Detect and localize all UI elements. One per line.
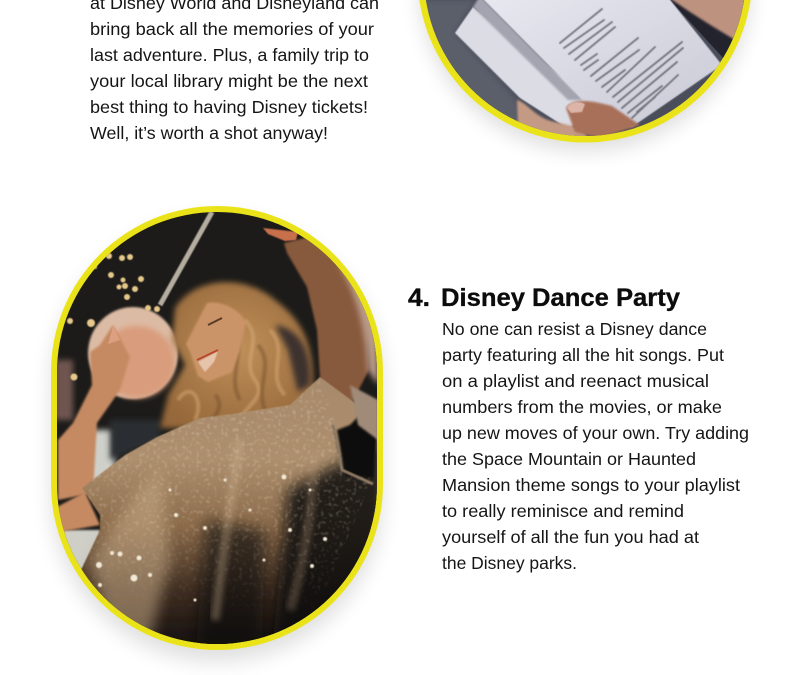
text block: item 4 description: the Space Mountain or Haunted [442,449,696,469]
text block: item 4 description: yourself of all the fun you had at [442,527,699,547]
text block: item 4 description: Mansion theme songs to your playlist [442,475,740,495]
sub: background room [92,426,119,480]
sub: face [186,302,246,382]
text block: item 3 closing paragraph [90,0,379,143]
text block: item 4 description: the Disney parks. [442,553,577,573]
text block: item 4 description: to really reminisce and remind [442,501,684,521]
text block: item 3 closing paragraph: last adventure. Plus, a family trip to [90,45,369,65]
sub: lamp shade [88,307,178,399]
text block: item 3 closing paragraph: Well, it’s worth a shot anyway! [90,123,328,143]
sub: left arm and hand [58,325,130,500]
sub: dark area behind right hand [670,0,744,58]
sub: raised right arm [283,237,370,402]
sub: gutter shadow [473,0,583,100]
sub: lamp cord [160,212,212,305]
sub: back sheet [455,7,590,130]
text block: item 4 description [442,319,749,573]
heading: 4. Disney Dance Party: Disney Dance Party [441,284,680,312]
text block: item 3 closing paragraph: bring back all the memories of your [90,19,374,39]
text block: item 4 description: numbers from the movies, or make [442,397,722,417]
sub: left hand fingers [516,99,588,136]
heading: 4. Disney Dance Party: 4. [408,284,430,312]
text block: item 4 description: on a playlist and reenact musical [442,371,709,391]
photo: hands holding open book in yellow circle [410,0,760,151]
sub: sequin dress [60,377,378,650]
text block: item 4 description: up new moves of your own. Try adding [442,423,749,443]
sub: hair [160,282,318,430]
text block: item 3 closing paragraph: best thing to having Disney tickets! [90,97,368,117]
text block: item 3 closing paragraph: your local library might be the next [90,71,368,91]
sub: main page [480,0,722,127]
sub: dress shading folds [196,520,265,650]
sub: printed verse lines on page [560,9,683,118]
sub: hair curls [178,320,285,420]
sub: right hand [670,0,744,40]
text block: item 4 description: No one can resist a Disney dance [442,319,707,339]
sub: fairy lights [67,253,160,380]
sub: sequin texture [88,382,370,596]
sub: sequin sparkles [96,474,327,602]
photo: woman dancing in yellow pill frame [50,205,390,662]
text block: item 4 description: party featuring all the hit songs. Put [442,345,724,365]
